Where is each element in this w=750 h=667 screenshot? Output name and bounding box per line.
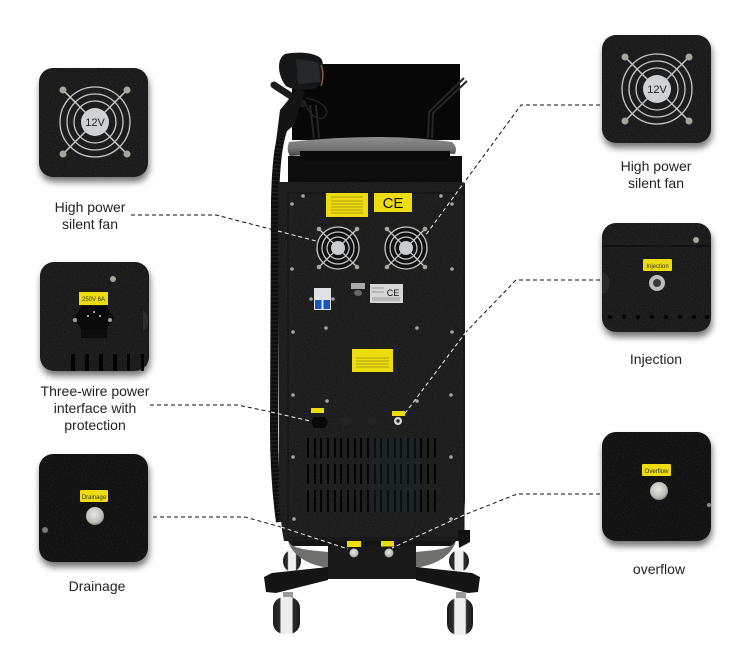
body screws (290, 194, 454, 521)
CE label: CE (383, 195, 403, 212)
lower warning label (352, 349, 393, 372)
label: right fan: silent fan (628, 175, 684, 191)
overflow port (381, 541, 394, 558)
vents (307, 438, 436, 512)
back casters (283, 550, 469, 572)
leader: right fan (425, 105, 600, 236)
label: right fan: High power (621, 158, 691, 174)
label: power interface: Three-wire power (41, 383, 149, 399)
panel: power interface (40, 262, 149, 371)
label: drainage: Drainage (69, 578, 126, 594)
machine (264, 53, 480, 635)
top warning label (326, 193, 368, 217)
fan left (317, 227, 359, 269)
panel: drainage (39, 454, 148, 562)
leader: left fan (131, 215, 316, 241)
drainage port (347, 541, 361, 558)
label: left fan: silent fan (62, 216, 118, 232)
label: power interface: protection (64, 417, 126, 433)
main body (278, 182, 465, 541)
panel: right fan (602, 35, 711, 143)
injection port (392, 411, 405, 425)
leader: power (150, 405, 310, 421)
front left caster (273, 592, 300, 634)
label: overflow: overflow (633, 561, 686, 577)
front right caster (447, 592, 473, 635)
touch screen (292, 64, 460, 140)
panel: injection (602, 223, 711, 332)
panel: injection: Injection (646, 264, 669, 270)
screen brackets (310, 78, 467, 138)
fan right (385, 227, 427, 269)
cable (274, 118, 288, 522)
panel: overflow (602, 432, 711, 541)
circuit breaker (309, 288, 335, 310)
handpiece (276, 53, 323, 142)
label: power interface: interface with (54, 400, 136, 416)
small switch (351, 283, 365, 296)
panel: drainage: Drainage (82, 495, 107, 501)
panel: overflow: Overflow (645, 469, 669, 475)
handpiece holder (274, 85, 303, 104)
nameplate (370, 284, 403, 303)
label: left fan: High power (55, 199, 125, 215)
base (264, 530, 480, 593)
blanking plugs (340, 416, 376, 426)
nameplate: CE (387, 288, 399, 298)
power socket (311, 408, 328, 428)
gray tray (288, 137, 456, 156)
leader: overflow (392, 494, 600, 548)
CE label (374, 193, 412, 212)
leader: drainage (153, 517, 348, 549)
panel: left fan (39, 68, 148, 177)
leader: injection (403, 280, 600, 416)
panel: right fan: 12V (647, 84, 667, 96)
panel: left fan: 12V (85, 117, 105, 129)
label: injection: Injection (630, 351, 682, 367)
panel: power interface: 250V 6A (82, 297, 105, 303)
